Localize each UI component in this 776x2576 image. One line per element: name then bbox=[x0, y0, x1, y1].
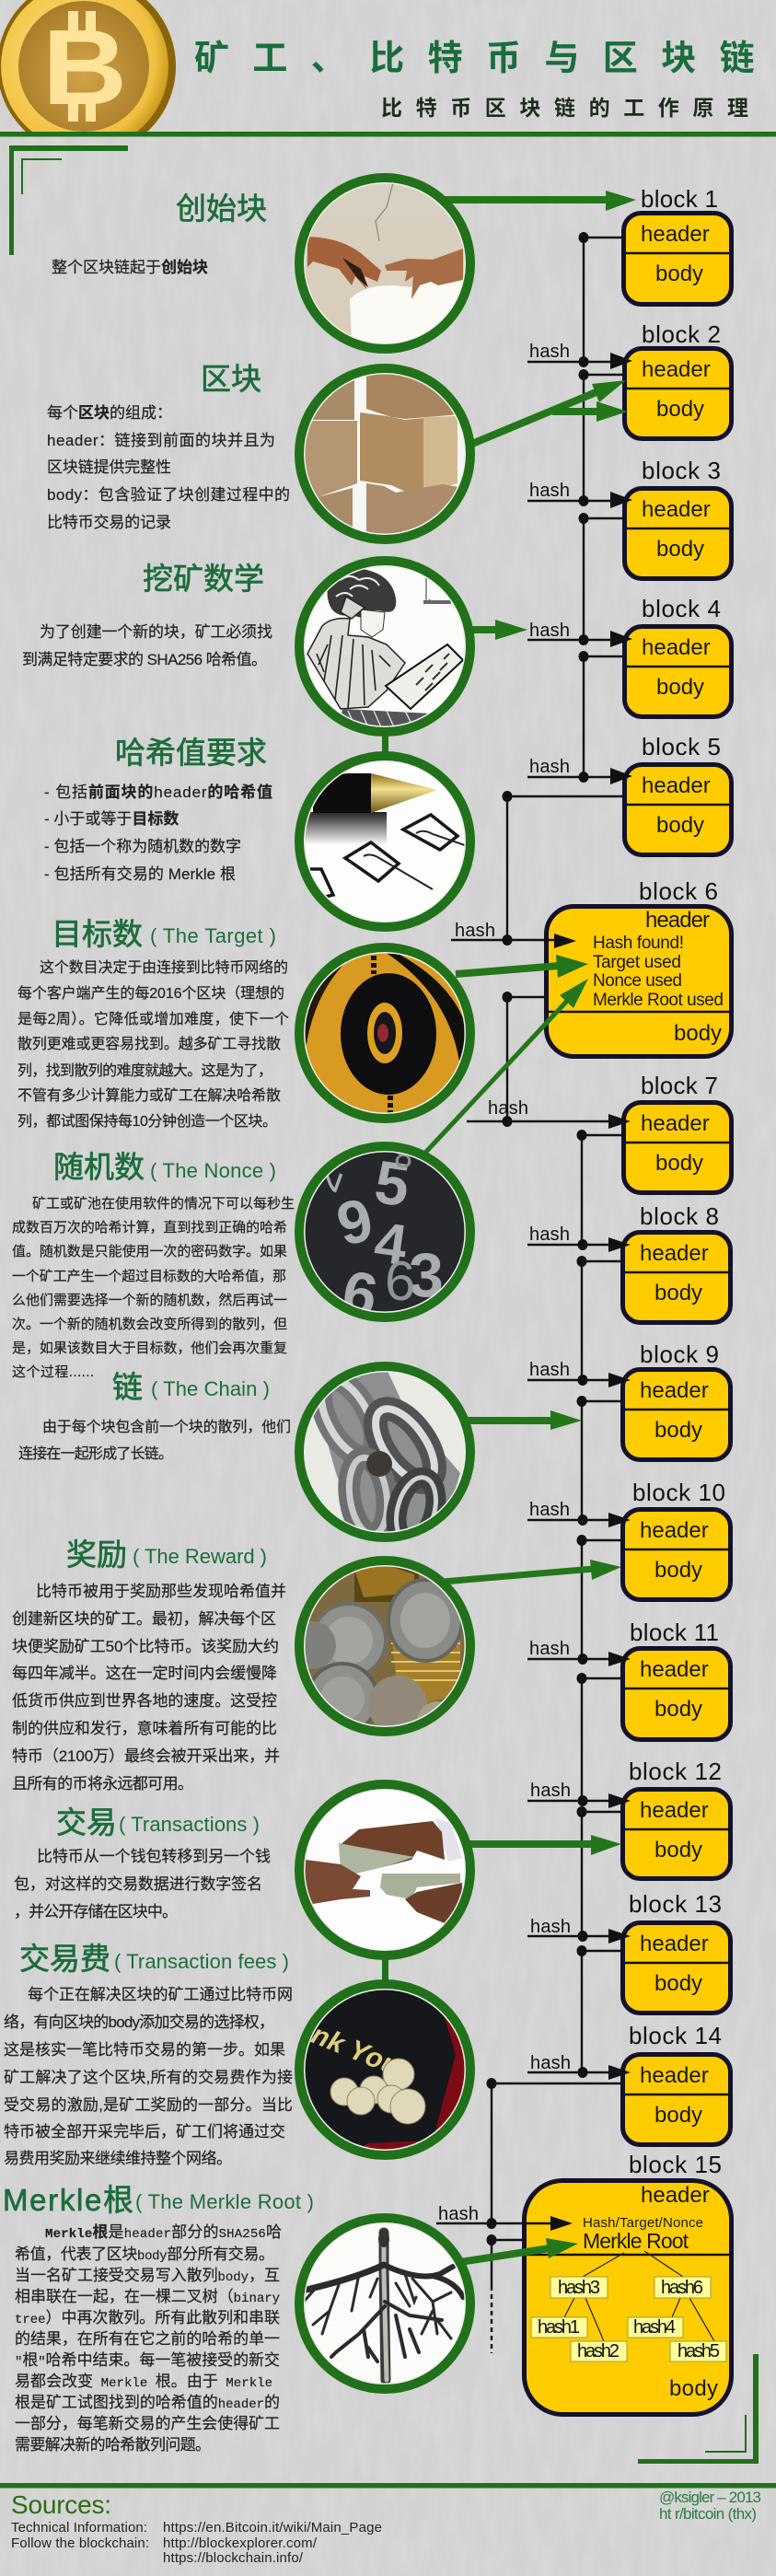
text: block composition: header：链接到前面的块并且为 bbox=[47, 432, 275, 449]
text: merkle root: 相串联在一起，在一棵二叉树（binary bbox=[15, 2288, 280, 2306]
arrow: mining math to hash bbox=[472, 620, 527, 640]
heading: chain: ( The Chain ) bbox=[151, 1377, 270, 1400]
arrow: genesis to block 1 bbox=[446, 191, 636, 211]
heading: reward: ( The Reward ) bbox=[133, 1545, 267, 1568]
text: merkle root: 希值，代表了区块body部分所有交易。 bbox=[15, 2245, 274, 2264]
text: target: 不管有多少计算能力或矿工在解决哈希散 bbox=[17, 1086, 281, 1104]
block 11: header bbox=[640, 1657, 709, 1682]
text: transactions: 比特币从一个钱包转移到另一个钱 bbox=[37, 1848, 271, 1865]
text: transactions: 包，对这样的交易数据进行数字签名 bbox=[14, 1875, 262, 1893]
text: reward bbox=[12, 1583, 286, 1793]
panel: hash requirements bbox=[44, 736, 272, 883]
block 7 bbox=[623, 1072, 732, 1193]
text: nonce bbox=[12, 1196, 295, 1380]
icon: coins bbox=[288, 1561, 470, 1742]
heading: genesis: 创始块 bbox=[176, 191, 267, 226]
text: transaction fees: 这是核实一笔比特币交易的第一步。如果 bbox=[4, 2041, 285, 2059]
text: merkle root: 易都会改变 Merkle 根。由于 Merkle bbox=[15, 2373, 272, 2391]
text: block composition: 每个区块的组成： bbox=[47, 404, 172, 422]
arrow: reward to body bbox=[443, 1560, 621, 1582]
corner frame: top left bbox=[9, 145, 128, 255]
block 3: block 3 bbox=[642, 457, 721, 484]
text: merkle root: tree）中再次散列。所有此散列和串联 bbox=[15, 2309, 280, 2327]
heading: nonce: 随机数 bbox=[53, 1150, 145, 1184]
text: reward: 块便奖励矿工50个比特币。该奖励大约 bbox=[12, 1638, 279, 1655]
title: 矿工、比特币与区块链 bbox=[194, 40, 776, 78]
block 4: body bbox=[656, 675, 704, 700]
heading: merkle root: ( The Merkle Root ) bbox=[135, 2190, 314, 2213]
text: mining math: 到满足特定要求的 SHA256 哈希值。 bbox=[22, 651, 267, 668]
panel: the nonce bbox=[12, 1150, 295, 1380]
text: target: 列，都试图保持每10分钟创造一个区块。 bbox=[17, 1113, 277, 1130]
icon: thank you box with coins bbox=[299, 1984, 470, 2155]
text: target: 散列更难或更容易找到。越多矿工寻找散 bbox=[17, 1036, 281, 1052]
text: requirement list: - 包括前面块的header的哈希值 bbox=[44, 783, 272, 801]
text: merkle root: 根是矿工试图找到的哈希值的header的 bbox=[15, 2394, 280, 2412]
block 7: header bbox=[641, 1111, 710, 1136]
block 3 bbox=[624, 457, 732, 578]
text: transaction fees bbox=[4, 1986, 293, 2167]
text: transaction fees: 特币被全部开采完毕后，矿工们将通过交 bbox=[4, 2123, 285, 2141]
block 8: block 8 bbox=[640, 1202, 719, 1230]
heading: target: ( The Target ) bbox=[150, 924, 276, 947]
sources: https://en.Bitcoin.it/wiki/Main_Page bbox=[163, 2520, 382, 2535]
icon: chalkboard numbers: 6 bbox=[338, 1257, 383, 1329]
text: nonce: 一个矿工产生一个超过目标数的大哈希值，那 bbox=[12, 1269, 286, 1284]
text: requirement list: - 包括所有交易的 Merkle 根 bbox=[44, 865, 236, 883]
block 14: block 14 bbox=[629, 2022, 722, 2049]
arrow: chain bbox=[468, 1410, 582, 1430]
text: nonce: 次。一个新的随机数会改变所得到的散列，但 bbox=[12, 1317, 287, 1332]
icon: bitcoin coin bbox=[0, 0, 176, 132]
block 8: header bbox=[640, 1241, 709, 1266]
arrow: merkle root bbox=[460, 2238, 578, 2262]
icon: chalkboard numbers: 8 bbox=[394, 1137, 412, 1175]
icon: chalkboard numbers: 4 bbox=[371, 1211, 411, 1278]
credits: @ksigler – 2013 bbox=[659, 2489, 761, 2506]
block 15 with merkle tree: block 15 bbox=[629, 2151, 722, 2178]
block 14 bbox=[622, 2022, 731, 2145]
text: block composition: body：包含验证了块创建过程中的 bbox=[47, 486, 290, 504]
block 15 with merkle tree: hash3 bbox=[558, 2278, 600, 2298]
text: transactions: ，并公开存储在区块中。 bbox=[14, 1903, 178, 1920]
text: reward: 每四年减半。这在一定时间内会缓慢降 bbox=[12, 1664, 277, 1682]
block 13: block 13 bbox=[629, 1890, 722, 1918]
block 15 with merkle tree: body bbox=[669, 2376, 718, 2401]
header bar bbox=[0, 132, 776, 136]
block 2: block 2 bbox=[642, 320, 721, 348]
icon: chalkboard numbers: 2 bbox=[299, 1159, 352, 1198]
icon: chalkboard numbers: 6 bbox=[385, 1250, 415, 1312]
footer bar bbox=[0, 2483, 776, 2488]
block 1: body bbox=[655, 261, 703, 286]
block 8: body bbox=[654, 1281, 702, 1305]
hash links: block 7 to 14: hash bbox=[529, 1500, 570, 1520]
heading: nonce bbox=[53, 1150, 276, 1184]
block 14: body bbox=[654, 2103, 702, 2128]
block 2: body bbox=[656, 397, 704, 422]
block 6: Merkle Root used bbox=[593, 991, 724, 1010]
text: merkle root: 的结果，在所有在它之前的哈希的单一 bbox=[15, 2330, 280, 2348]
block 3: header bbox=[642, 497, 711, 522]
hash links: block 5 to 7: hash bbox=[455, 921, 495, 941]
text: chain: 连接在一起形成了长链。 bbox=[18, 1445, 173, 1462]
icon: chalkboard numbers: 5 bbox=[371, 1147, 413, 1219]
text: transaction fees: 每个正在解决区块的矿工通过比特币网 bbox=[28, 1986, 293, 2003]
block 5: block 5 bbox=[642, 733, 721, 760]
heading: transaction fees: ( Transaction fees ) bbox=[114, 1950, 289, 1973]
icon: pen and checkboxes bbox=[299, 756, 470, 927]
block 14: header bbox=[640, 2063, 709, 2088]
hash links: chain 1 to 5: hash bbox=[529, 342, 570, 362]
block 6: header bbox=[645, 908, 710, 933]
icon: target bbox=[299, 947, 470, 1119]
heading: merkle root bbox=[3, 2183, 314, 2217]
text: genesis: 整个区块链起于创始块 bbox=[52, 259, 208, 276]
block 1: block 1 bbox=[641, 185, 718, 213]
block 5: body bbox=[656, 813, 704, 838]
heading: transaction fees: 交易费 bbox=[19, 1942, 110, 1976]
block 7: block 7 bbox=[641, 1072, 718, 1099]
block 9: block 9 bbox=[640, 1340, 719, 1368]
block 15 with merkle tree bbox=[524, 2151, 732, 2414]
hash links: block 7 to 14: hash bbox=[529, 1360, 570, 1380]
connector: circle 3 to 4 bbox=[382, 735, 388, 753]
panel: merkle root bbox=[3, 2183, 314, 2454]
sources: http://blockexplorer.com/ bbox=[163, 2535, 318, 2551]
block 4: block 4 bbox=[642, 595, 721, 622]
heading: target: 目标数 bbox=[52, 917, 143, 951]
text: nonce: 么他们需要选择一个新的随机数，然后再试一 bbox=[12, 1293, 287, 1308]
block 15 with merkle tree: hash5 bbox=[678, 2341, 720, 2361]
block 4 bbox=[624, 595, 732, 716]
block 15 with merkle tree: hash1 bbox=[538, 2317, 580, 2338]
text: merkle root: Merkle根是header部分的SHA256哈 bbox=[45, 2223, 282, 2242]
block 1 bbox=[623, 185, 732, 304]
text: target: 列，找到散列的难度就越大。这是为了， bbox=[17, 1062, 272, 1079]
heading: block: 区块 bbox=[201, 362, 261, 396]
hash links: chain 1 to 5: hash bbox=[529, 757, 570, 777]
heading: nonce: ( The Nonce ) bbox=[150, 1159, 276, 1182]
text: transaction fees: 受交易的激励,是矿工奖励的一部分。当比 bbox=[4, 2096, 293, 2114]
sources: Follow the blockchain: bbox=[11, 2535, 149, 2551]
block 15 with merkle tree: hash6 bbox=[661, 2278, 703, 2298]
text: nonce: 是，如果该数目大于目标数，他们会再次重复 bbox=[12, 1340, 287, 1356]
block 9: header bbox=[640, 1378, 709, 1403]
text: requirement list: - 包括一个称为随机数的数字 bbox=[44, 838, 241, 855]
block 3: body bbox=[656, 537, 704, 562]
block 12: block 12 bbox=[629, 1758, 722, 1785]
block 6 bbox=[547, 877, 732, 1057]
heading: chain: 链 bbox=[112, 1370, 143, 1404]
block 10 bbox=[622, 1479, 731, 1600]
hash links: chain 1 to 5: hash bbox=[529, 481, 570, 501]
block 15 with merkle tree: header bbox=[641, 2183, 710, 2208]
block 11 bbox=[622, 1619, 731, 1740]
text: block composition: 比特币交易的记录 bbox=[47, 514, 171, 531]
arrow: nonce used bbox=[425, 979, 588, 1153]
text: mining math: 为了创建一个新的块，矿工必须找 bbox=[40, 623, 272, 641]
hash links: block 5 to 7 bbox=[451, 791, 631, 1129]
block 1: header bbox=[641, 222, 710, 247]
text: requirement list bbox=[44, 783, 272, 883]
icon: chalkboard numbers: 3 bbox=[409, 1240, 444, 1310]
block 9: body bbox=[654, 1418, 702, 1443]
block 13 bbox=[622, 1890, 731, 2013]
heading: chain bbox=[112, 1370, 270, 1404]
text: target bbox=[17, 958, 289, 1130]
block 6: Nonce used bbox=[593, 971, 682, 991]
heading: transactions: 交易 bbox=[56, 1805, 117, 1839]
sources bbox=[11, 2490, 382, 2566]
icon: tree roots bbox=[299, 2218, 470, 2389]
hash links: block 7 to 14: hash bbox=[530, 1781, 571, 1801]
text: transactions bbox=[14, 1848, 271, 1920]
hash links: block 7 to 14: hash bbox=[530, 1917, 571, 1937]
block 12 bbox=[622, 1758, 731, 1878]
hash links: block 14 to 15: hash bbox=[438, 2204, 479, 2224]
hash links: block 5 to 7: hash bbox=[488, 1098, 528, 1119]
block 6: block 6 bbox=[639, 877, 718, 905]
text: reward: 特币（2100万）最终会被开采出来，并 bbox=[12, 1747, 280, 1765]
icon: bitcoin coin: B bbox=[42, 7, 127, 127]
block 4: header bbox=[642, 635, 711, 660]
text: merkle root: 一部分，每笔新交易的产生会使得矿工 bbox=[15, 2414, 280, 2432]
text: reward: 且所有的币将永远都可用。 bbox=[12, 1775, 193, 1793]
block 12: body bbox=[654, 1838, 702, 1862]
hash links: block 7 to 14: hash bbox=[530, 2053, 571, 2073]
corner frame: bottom right bbox=[638, 2354, 759, 2464]
heading: transactions bbox=[56, 1805, 260, 1839]
block 10: header bbox=[640, 1518, 709, 1543]
text: target: 是每2周）。它降低或增加难度，使下一个 bbox=[17, 1011, 289, 1027]
text: merkle root bbox=[15, 2223, 282, 2454]
text: nonce: 这个过程...... bbox=[12, 1364, 94, 1380]
panel: mining math bbox=[22, 562, 272, 668]
heading: target bbox=[52, 917, 276, 951]
hash links: block 7 to 14 bbox=[527, 1130, 631, 2080]
sources: https://blockchain.info/ bbox=[163, 2550, 304, 2566]
text: requirement list: - 小于或等于目标数 bbox=[44, 810, 179, 828]
text: mining math bbox=[22, 623, 272, 668]
heading: reward: 奖励 bbox=[66, 1537, 127, 1572]
block 15 with merkle tree: hash2 bbox=[577, 2341, 620, 2361]
text: merkle root: 需要解决新的哈希散列问题。 bbox=[15, 2436, 211, 2454]
block 2 bbox=[624, 320, 732, 438]
text: reward: 制的供应和发行，意味着所有可能的比 bbox=[12, 1720, 277, 1737]
heading: merkle root: Merkle根 bbox=[3, 2183, 133, 2217]
text: reward: 低货币供应到世界各地的速度。这受控 bbox=[12, 1692, 277, 1710]
block 6: body bbox=[674, 1021, 722, 1046]
block 13: header bbox=[640, 1932, 709, 1956]
hash links: chain 1 to 5: hash bbox=[529, 621, 570, 641]
text: chain: 由于每个块包含前一个块的散列，他们 bbox=[42, 1419, 291, 1435]
text: target: 每个客户端产生的每2016个区块（理想的 bbox=[17, 985, 284, 1002]
credits bbox=[659, 2489, 761, 2523]
panel: the reward bbox=[12, 1537, 286, 1793]
heading: mining math: 挖矿数学 bbox=[143, 562, 264, 596]
icon: cardboard block bbox=[299, 368, 470, 540]
text: block composition: 区块链提供完整性 bbox=[47, 458, 171, 476]
panel: transaction fees bbox=[4, 1942, 293, 2167]
text: merkle root: "根"哈希中结束。每一笔被接受的新交 bbox=[15, 2351, 280, 2370]
text: transaction fees: 矿工解决了这个区块,所有的交易费作为接 bbox=[4, 2069, 293, 2086]
block 2: header bbox=[642, 357, 711, 382]
block 15 with merkle tree: hash4 bbox=[633, 2317, 676, 2338]
heading: transactions: ( Transactions ) bbox=[119, 1813, 260, 1836]
hash links: chain 1 to 5 bbox=[527, 232, 632, 784]
icon: chalkboard numbers: 9 bbox=[330, 1184, 379, 1259]
text: nonce: 矿工或矿池在使用软件的情况下可以每秒生 bbox=[32, 1196, 295, 1212]
panel: block bbox=[47, 362, 290, 531]
block 6: Target used bbox=[593, 953, 681, 972]
panel: transactions bbox=[14, 1805, 271, 1920]
connector: circle 9 to 10 bbox=[382, 1958, 388, 1981]
text: nonce: 值。随机数是只能使用一次的密码数字。如果 bbox=[12, 1244, 287, 1259]
icon: chain bbox=[299, 1366, 470, 1547]
icon: creation of adam bbox=[299, 178, 470, 349]
text: reward: 创建新区块的矿工。最初，解决每个区 bbox=[12, 1610, 276, 1628]
text: block composition bbox=[47, 404, 290, 531]
icon: boy doing math bbox=[299, 561, 470, 732]
text: reward: 比特币被用于奖励那些发现哈希值并 bbox=[36, 1583, 286, 1600]
subtitle: 比特币区块链的工作原理 bbox=[381, 96, 762, 120]
block 7: body bbox=[655, 1151, 703, 1176]
text: chain bbox=[18, 1419, 291, 1462]
block 6: Hash found! bbox=[593, 934, 684, 953]
text: target: 这个数目决定于由连接到比特币网络的 bbox=[40, 958, 288, 976]
panel: the chain bbox=[18, 1370, 291, 1462]
hash links: block 14 to 15 bbox=[436, 2078, 623, 2353]
block 15 with merkle tree: Hash/Target/Nonce bbox=[583, 2215, 703, 2231]
sources: Sources: bbox=[11, 2490, 111, 2519]
text: transaction fees: 易费用奖励来继续维持整个网络。 bbox=[4, 2150, 232, 2167]
heading: hash requirements: 哈希值要求 bbox=[115, 736, 267, 770]
arrow: target used bbox=[456, 955, 588, 978]
text: nonce: 成数百万次的哈希计算，直到找到正确的哈希 bbox=[12, 1219, 287, 1236]
block 13: body bbox=[654, 1971, 702, 1996]
block 11: block 11 bbox=[630, 1619, 719, 1646]
icon: exchanging money bbox=[299, 1784, 470, 1955]
arrow: block to header and body bbox=[472, 380, 628, 444]
block 5: header bbox=[642, 773, 711, 798]
hash links: block 7 to 14: hash bbox=[529, 1224, 570, 1245]
block 9 bbox=[622, 1340, 731, 1460]
sources: Technical Information: bbox=[11, 2520, 147, 2535]
heading: transaction fees bbox=[19, 1942, 289, 1976]
block 10: body bbox=[654, 1558, 702, 1583]
block 8 bbox=[622, 1202, 731, 1322]
block 5 bbox=[624, 733, 732, 854]
hash links: block 7 to 14: hash bbox=[529, 1639, 570, 1659]
text: merkle root: 当一名矿工接受交易写入散列body，互 bbox=[15, 2267, 280, 2285]
block 12: header bbox=[640, 1798, 709, 1823]
icon: chalkboard numbers bbox=[299, 1137, 470, 1329]
panel: genesis block bbox=[52, 191, 267, 276]
heading: reward bbox=[66, 1537, 267, 1572]
block 11: body bbox=[654, 1697, 702, 1722]
panel: the target bbox=[17, 917, 289, 1130]
icon: thank you box with coins: nk You bbox=[307, 2019, 404, 2082]
text: transaction fees: 络，有向区块的body添加交易的选择权， bbox=[4, 2013, 274, 2031]
arrow: transactions to body bbox=[468, 1835, 621, 1855]
credits: ht r/bitcoin (thx) bbox=[659, 2505, 757, 2523]
block 10: block 10 bbox=[632, 1479, 725, 1506]
block 15 with merkle tree: Merkle Root bbox=[583, 2229, 689, 2253]
